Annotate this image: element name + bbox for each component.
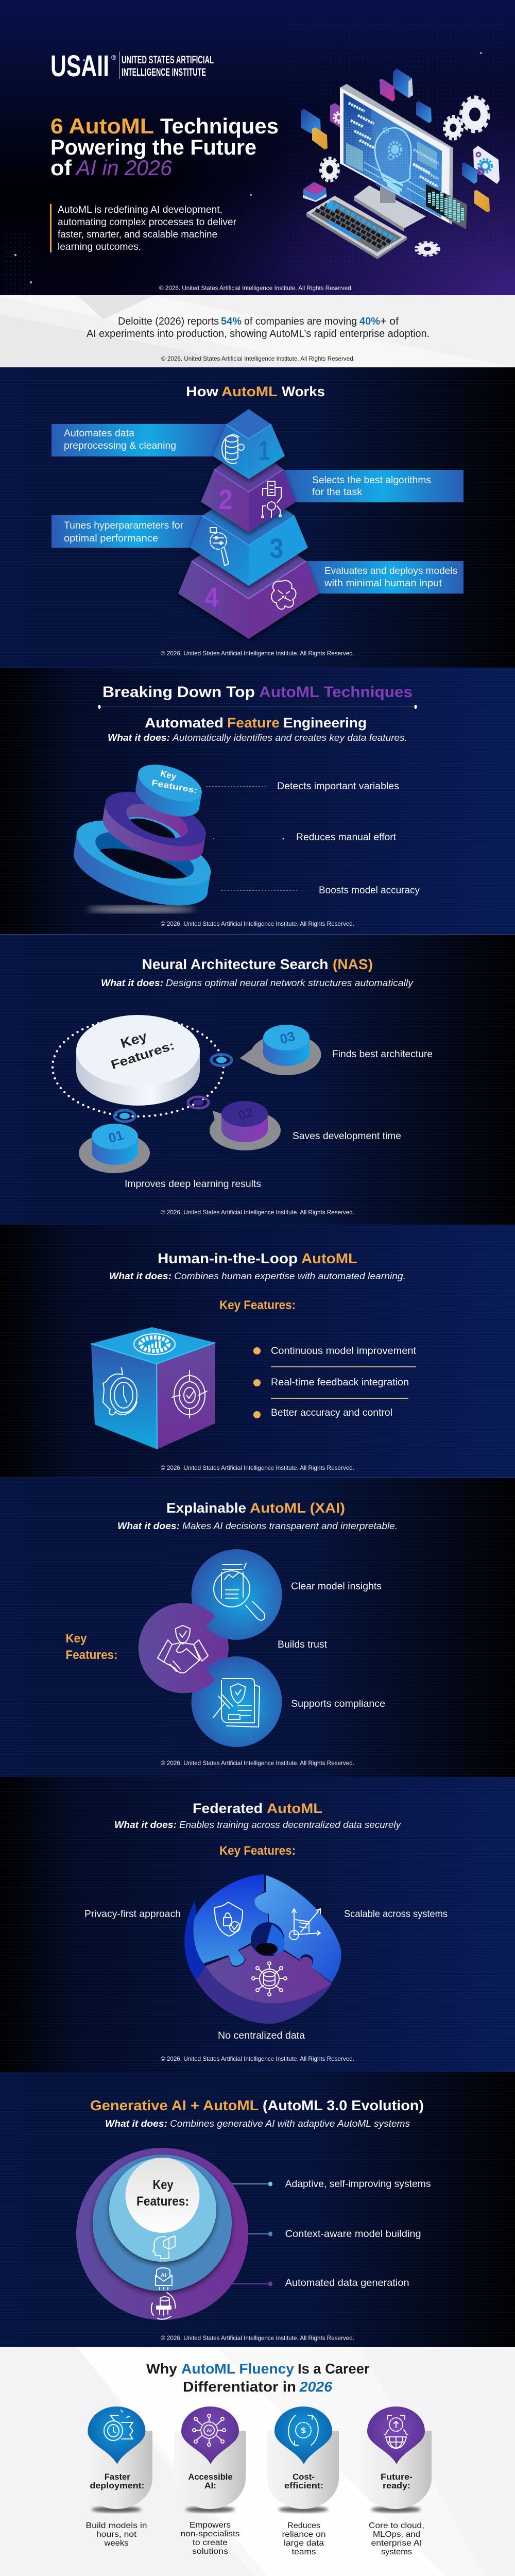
card: future ready: MLOps, and <box>373 2530 420 2539</box>
circle: insights <box>192 1549 382 1640</box>
icon: AI network: AI <box>207 2428 212 2434</box>
card: future ready: Core to cloud, <box>369 2521 424 2530</box>
centre hub <box>251 1922 285 1956</box>
feature 01: Improves deep learning results <box>125 1178 261 1190</box>
key features label: Key Features: <box>219 1844 296 1858</box>
bar 1: Automates data <box>64 428 134 439</box>
heading: Works <box>282 384 325 399</box>
card: cost efficient <box>267 2406 339 2556</box>
intro text block: automating complex processes to deliver <box>58 216 236 228</box>
card: accessible AI <box>174 2406 246 2556</box>
icon: floating cards <box>301 69 500 212</box>
what it does: What it does: <box>114 1820 177 1830</box>
icon: legal document <box>213 1679 260 1727</box>
heading <box>90 2097 424 2113</box>
card: future ready: enterprise AI <box>371 2539 422 2548</box>
feature labels <box>84 1908 448 2041</box>
interlocked circles <box>139 1549 385 1747</box>
panel: hero <box>0 0 515 295</box>
card: accessible AI: AI: <box>204 2481 216 2490</box>
panel: explainable AutoML <box>0 1478 515 1777</box>
icon: dollar gear: $ <box>301 2427 306 2435</box>
subheading: Engineering <box>283 715 367 731</box>
heading: AutoML <box>221 384 278 399</box>
card: faster deployment: Build models in <box>85 2521 147 2530</box>
logo: USAII: ® <box>111 54 116 61</box>
logo: USAII: USAII <box>50 49 109 83</box>
card: accessible AI: to create <box>193 2538 228 2547</box>
card: accessible AI: Accessible <box>188 2472 233 2482</box>
intro text block: AutoML is redefining AI development, <box>58 204 222 215</box>
feature labels: Automated data generation <box>285 2277 409 2289</box>
key features cylinder: Key <box>118 1028 149 1051</box>
circle: trust <box>139 1603 328 1693</box>
heading: AutoML Fluency <box>181 2361 294 2377</box>
icon: dollar gear <box>288 2415 318 2445</box>
callouts <box>206 781 420 896</box>
card: future ready: Future- <box>381 2472 413 2482</box>
feature 02: Saves development time <box>293 1130 401 1142</box>
nested circles <box>76 2148 248 2320</box>
statistic text: + of <box>380 316 399 327</box>
panel: Deloitte statistic <box>0 295 515 367</box>
heading: breaking down <box>98 684 417 709</box>
circle: compliance: Supports compliance <box>291 1698 385 1709</box>
orbit nodes <box>114 1054 232 1122</box>
pyramid block 1: 1 <box>259 435 270 466</box>
title <box>50 114 279 180</box>
copyright: © 2026. United States Artificial Intelligence Institute. All Rights Reserved. <box>161 1759 354 1767</box>
copyright: © 2026. United States Artificial Intelligence Institute. All Rights Reserved. <box>161 2334 354 2342</box>
heading: Generative AI + AutoML <box>90 2097 259 2113</box>
heading: (AutoML 3.0 Evolution) <box>263 2097 424 2113</box>
bar 3 <box>52 515 206 548</box>
key features circle: Key <box>152 2178 174 2192</box>
bar 2 <box>283 470 464 502</box>
waveform panel <box>426 184 467 229</box>
card: cost efficient: large data <box>284 2539 324 2548</box>
feature labels: Privacy-first approach <box>84 1908 181 1920</box>
card: accessible AI: Empowers <box>190 2521 231 2530</box>
title: Powering the Future <box>50 135 256 159</box>
what it does: Designs optimal neural network structures automatically <box>166 978 414 988</box>
bar 3: optimal performance <box>64 533 158 544</box>
callout: reduces <box>213 832 397 843</box>
callout: boosts: Boosts model accuracy <box>319 885 420 896</box>
card: faster deployment: deployment: <box>90 2481 144 2490</box>
card: accessible AI: solutions <box>192 2547 228 2556</box>
icon: tuning gear <box>210 528 229 566</box>
key features label: Features: <box>66 1648 117 1662</box>
heading <box>186 384 325 399</box>
feature labels: Adaptive, self-improving systems <box>285 2178 431 2190</box>
pyramid block 3 <box>190 484 308 586</box>
statistic text: 40% <box>359 316 380 327</box>
statistic text: AI experiments into production, showing AutoML’s rapid enterprise adoption. <box>87 328 430 340</box>
pyramid block 1 <box>213 409 285 479</box>
illustration: isometric computer <box>301 69 500 259</box>
heading <box>166 1500 345 1516</box>
title: of <box>50 156 72 180</box>
monitor stand <box>354 185 426 232</box>
card: future ready <box>360 2406 432 2556</box>
what it does: What it does: <box>108 733 170 743</box>
panel: human in the loop <box>0 1225 515 1478</box>
panel: generative AI + AutoML <box>0 2072 515 2347</box>
heading: How <box>186 384 219 399</box>
icon: AI envelope <box>156 2268 172 2290</box>
logo: USAII: INTELLIGENCE INSTITUTE <box>122 66 206 78</box>
statistic text: 54% <box>221 316 242 327</box>
panel: federated AutoML <box>0 1777 515 2072</box>
heading: 2026 <box>299 2379 332 2395</box>
icon: gears <box>320 97 489 256</box>
feature labels: Scalable across systems <box>344 1908 448 1920</box>
copyright: © 2026. United States Artificial Intelligence Institute. All Rights Reserved. <box>161 1464 354 1471</box>
copyright: © 2026. United States Artificial Intelligence Institute. All Rights Reserved. <box>161 2055 354 2062</box>
statistic text: of companies are moving <box>244 316 357 327</box>
icon: shield lock <box>215 1902 243 1936</box>
heading: Human-in-the-Loop <box>158 1250 298 1266</box>
circle: compliance <box>192 1656 385 1747</box>
intro text block <box>50 204 236 252</box>
card: faster deployment: Faster <box>105 2472 130 2482</box>
what it does: Automatically identifies and creates key data features. <box>172 733 407 743</box>
copyright: © 2026. United States Artificial Intelligence Institute. All Rights Reserved. <box>161 650 354 657</box>
step bars <box>52 424 464 594</box>
pyramid block 4 <box>178 520 319 639</box>
card: cost efficient: efficient: <box>284 2481 323 2490</box>
bar 4 <box>304 561 464 594</box>
what it does: Enables training across decentralized data securely <box>179 1820 401 1830</box>
bar 2: Selects the best algorithms <box>312 474 431 486</box>
feature 03: Finds best architecture <box>332 1048 433 1060</box>
key features cylinder: Features: <box>109 1039 176 1072</box>
top cylinder: Key <box>159 768 178 782</box>
statistic text <box>87 316 430 340</box>
monitor <box>340 84 453 225</box>
callout: reduces: Reduces manual effort <box>296 832 397 843</box>
card: cost efficient: teams <box>291 2548 316 2556</box>
card: faster deployment: weeks <box>104 2539 129 2548</box>
copyright: © 2026. United States Artificial Intelligence Institute. All Rights Reserved. <box>159 284 353 292</box>
bar 1: preprocessing & cleaning <box>64 440 176 451</box>
heading <box>146 2361 370 2395</box>
bar 3: Tunes hyperparameters for <box>64 520 183 531</box>
what it does: What it does: <box>105 2119 167 2129</box>
subheading: Automated <box>145 715 224 731</box>
heading: AutoML <box>301 1250 357 1266</box>
pyramid block 3: 3 <box>270 533 283 564</box>
icon: stopwatch <box>104 2410 133 2441</box>
icon: AI envelope: AI <box>161 2273 166 2279</box>
heading: breaking down: AutoML Techniques <box>259 684 413 701</box>
icon: globe gear <box>384 2415 408 2448</box>
subheading <box>145 715 367 731</box>
feature 03 <box>240 1025 433 1075</box>
feature 02: 02 <box>236 1105 255 1123</box>
feature labels: Context-aware model building <box>285 2228 421 2240</box>
icon: gear chart <box>134 1334 175 1354</box>
callout: detects: Detects important variables <box>277 781 399 792</box>
icon: algorithm circuit <box>262 481 281 518</box>
pyramid block 4: 4 <box>205 582 218 613</box>
icon: data cycle <box>151 2293 175 2319</box>
heading: Is a Career <box>298 2361 370 2377</box>
heading: Differentiator in <box>183 2379 296 2395</box>
top cylinder: Features: <box>151 778 198 795</box>
piece edge: left <box>184 1901 205 1980</box>
what it does: What it does: <box>109 1271 171 1281</box>
panel: neural architecture search <box>0 934 515 1225</box>
heading: (NAS) <box>333 956 373 972</box>
feature 02 <box>210 1101 401 1150</box>
key features circle: Features: <box>136 2194 189 2209</box>
heading: Federated <box>193 1801 263 1816</box>
intro text block: learning outcomes. <box>58 241 141 252</box>
what it does: What it does: <box>117 1521 180 1531</box>
bottom ring <box>73 820 211 906</box>
what it does: Combines human expertise with automated learning. <box>174 1271 406 1281</box>
key features label <box>66 1632 117 1662</box>
copyright: © 2026. United States Artificial Intelligence Institute. All Rights Reserved. <box>161 1209 354 1216</box>
card: faster deployment: hours, not <box>96 2530 137 2539</box>
piece edge: purple side <box>196 1966 332 2024</box>
intro text block: faster, smarter, and scalable machine <box>58 229 217 240</box>
icon: data network <box>252 1962 287 1996</box>
top cylinder <box>133 757 207 817</box>
key features cylinder <box>76 1015 200 1106</box>
icon: AI network <box>193 2414 226 2446</box>
icon: AI brain <box>271 581 296 609</box>
feature list: Real-time feedback integration <box>271 1377 409 1388</box>
logo: USAII <box>50 49 214 83</box>
key features circle <box>126 2158 200 2233</box>
circle: trust: Builds trust <box>278 1639 328 1650</box>
statistic text: Deloitte (2026) reports <box>118 316 219 327</box>
heading <box>193 1801 322 1816</box>
key features label: Key Features: <box>219 1298 296 1312</box>
panel: automated feature engineering <box>0 668 515 934</box>
icon: head and book <box>153 2236 175 2259</box>
ring stack chart <box>73 765 211 906</box>
heading: breaking down: Breaking Down Top <box>102 684 255 701</box>
heading: Neural Architecture Search <box>142 956 329 972</box>
card: future ready: systems <box>381 2548 412 2556</box>
icon: growth chart <box>289 1909 320 1940</box>
feature labels: No centralized data <box>218 2030 305 2041</box>
title: Techniques <box>160 114 279 138</box>
puzzle piece: privacy <box>194 1874 268 1966</box>
icon: handshake shield <box>158 1625 208 1673</box>
heading: AutoML (XAI) <box>250 1500 345 1516</box>
keyboard <box>306 196 407 259</box>
feature list <box>253 1345 417 1418</box>
icon: target <box>172 1370 207 1418</box>
pyramid block 2 <box>201 443 296 532</box>
feature 01 <box>79 1124 261 1190</box>
middle ring <box>102 792 206 861</box>
puzzle piece: scalable <box>254 1875 341 1982</box>
key features label: Key <box>66 1632 87 1646</box>
icon: magnifier report <box>214 1563 265 1620</box>
heading: Explainable <box>166 1500 246 1516</box>
feature 03: 03 <box>278 1028 297 1047</box>
heading: Why <box>146 2361 177 2377</box>
what it does: Makes AI decisions transparent and interpretable. <box>182 1521 398 1531</box>
icon: data gear <box>222 435 244 464</box>
card: cost efficient: Reduces <box>287 2521 320 2530</box>
what it does: What it does: <box>101 978 163 988</box>
ground shadow <box>87 906 195 913</box>
bar 1 <box>52 424 227 456</box>
bar 4: with minimal human input <box>324 578 442 589</box>
title: 6 AutoML <box>50 114 154 138</box>
subheading: Feature <box>227 715 280 731</box>
heading: AutoML <box>267 1801 322 1816</box>
what it does: Combines generative AI with adaptive AutoML systems <box>170 2119 410 2129</box>
feature list: Continuous model improvement <box>271 1345 417 1357</box>
dotted orbit <box>53 1018 224 1116</box>
copyright: © 2026. United States Artificial Intelligence Institute. All Rights Reserved. <box>161 920 354 927</box>
pyramid block 2: 2 <box>218 484 233 515</box>
bar 2: for the task <box>312 486 362 498</box>
cube <box>91 1327 215 1449</box>
title: AI in 2026 <box>75 156 173 180</box>
panel: career differentiator <box>0 2347 515 2576</box>
card: cost efficient: reliance on <box>282 2530 325 2539</box>
circle: insights: Clear model insights <box>291 1581 382 1592</box>
feature labels <box>285 2178 431 2289</box>
card: future ready: ready: <box>383 2481 410 2490</box>
heading <box>158 1250 357 1266</box>
logo: USAII: UNITED STATES ARTIFICIAL <box>122 54 214 66</box>
connector lines <box>210 2181 272 2286</box>
card: accessible AI: non-specialists <box>180 2530 240 2538</box>
puzzle wheel <box>184 1874 341 2024</box>
card: cost efficient: Cost- <box>293 2472 315 2482</box>
copyright: © 2026. United States Artificial Intelligence Institute. All Rights Reserved. <box>161 355 355 362</box>
bar 4: Evaluates and deploys models <box>324 565 457 577</box>
puzzle piece: data <box>205 1945 332 2003</box>
icon: AI brain: AI <box>281 595 286 601</box>
panel: how AutoML works <box>0 367 515 668</box>
icon: gear clock <box>103 1368 137 1415</box>
feature list: Better accuracy and control <box>271 1407 392 1418</box>
feature 01: 01 <box>107 1127 125 1146</box>
card: faster deployment <box>81 2406 152 2548</box>
